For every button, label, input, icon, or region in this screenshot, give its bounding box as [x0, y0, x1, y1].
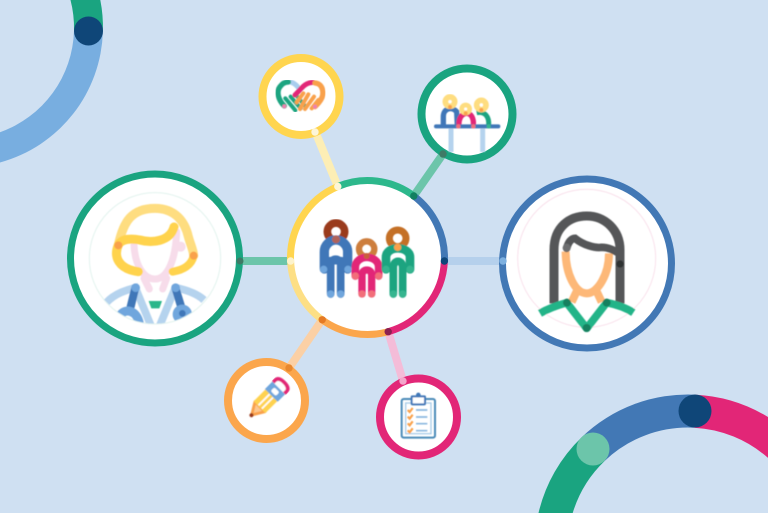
ring segment: pale yellow	[291, 261, 322, 320]
icon: heart of hands	[278, 82, 323, 110]
connector: patient to family	[445, 257, 503, 265]
connector: heart to family	[315, 131, 338, 187]
ring segment: blue	[414, 196, 444, 261]
panel: doctor	[70, 174, 240, 343]
connector dot	[311, 128, 319, 136]
icon: woman	[518, 189, 656, 332]
figure: adult blue	[320, 223, 352, 298]
panel: heart hands	[262, 58, 340, 136]
connector: clipboard to family	[388, 331, 403, 381]
connector: doctor to family	[240, 257, 291, 265]
icon: people at table	[436, 97, 498, 152]
figure: adult green	[382, 230, 414, 298]
panel: patient	[502, 179, 672, 348]
icon: family	[320, 223, 414, 298]
decorative arc: top left	[0, 0, 103, 162]
connector dot	[285, 364, 293, 372]
panel: clipboard	[380, 377, 457, 456]
figure: child pink	[352, 241, 382, 298]
ring segment: green	[338, 181, 414, 196]
connector: pencil to family	[289, 320, 322, 368]
icon: clipboard checklist	[402, 393, 435, 438]
icon: doctor	[89, 193, 221, 325]
connector: meeting to family	[413, 154, 443, 197]
connection nodes on hub	[236, 183, 507, 335]
ring segment: pink	[388, 261, 444, 332]
ring segment: yellow	[291, 186, 338, 261]
connector dot	[399, 377, 407, 385]
icon: pencil	[244, 376, 291, 423]
panel: pencil	[228, 362, 305, 439]
decorative arc: bottom right	[538, 394, 768, 513]
connector dot	[439, 150, 447, 158]
panel: team meeting	[422, 68, 512, 160]
ring segment: orange	[322, 320, 388, 335]
panel: family hub	[290, 180, 444, 335]
